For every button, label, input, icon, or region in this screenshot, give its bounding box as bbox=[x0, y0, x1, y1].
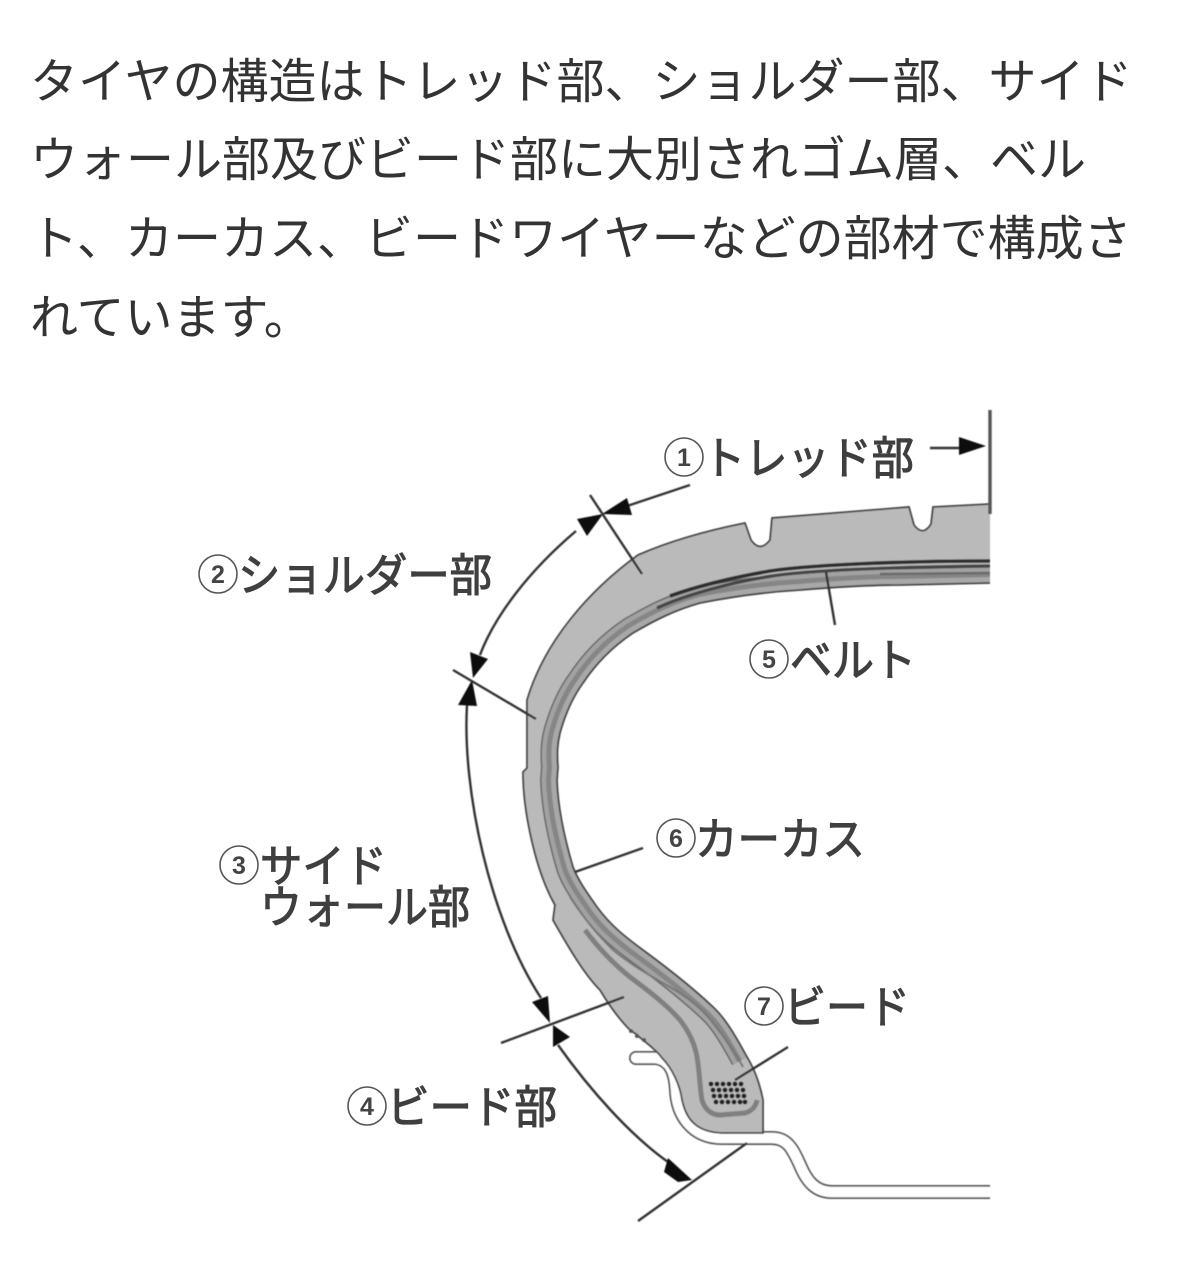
carcass layers bbox=[557, 560, 992, 1115]
label: tread: 1 bbox=[677, 444, 691, 472]
belt bbox=[657, 561, 990, 608]
label: belt: 5 bbox=[762, 646, 776, 674]
wheel rim bbox=[636, 1058, 1000, 1192]
text block: tire structure introduction bbox=[30, 56, 1133, 345]
label: shoulder: 2 bbox=[211, 561, 225, 589]
tread width marker bbox=[930, 410, 990, 514]
dimension arcs and arrows bbox=[458, 485, 692, 1182]
tire outline bbox=[523, 504, 990, 1133]
tire body bbox=[523, 504, 990, 1133]
section boundary ticks bbox=[453, 495, 747, 1221]
label: sidewall bbox=[220, 841, 470, 933]
text block: tire structure introduction: タイヤの構造はトレッド部、ショルダー部、サイド bbox=[30, 56, 1133, 109]
leader lines bbox=[575, 572, 835, 1080]
label: bead section: 4 bbox=[360, 1093, 374, 1121]
label: carcass: 6 bbox=[669, 825, 683, 853]
label: sidewall: 3 bbox=[232, 852, 246, 880]
text block: tire structure introduction: ウォール部及びビード部に大別されゴム層、ベル bbox=[30, 134, 1086, 187]
label: tread: トレッド部 bbox=[703, 433, 914, 484]
label: sidewall: ウォール部 bbox=[260, 882, 470, 933]
label: bead section: ビード部 bbox=[387, 1082, 557, 1133]
bead sidewall serrations bbox=[629, 1029, 646, 1042]
label: bead: ビード bbox=[784, 982, 910, 1033]
label: carcass: カーカス bbox=[695, 814, 865, 865]
text block: tire structure introduction: れています。 bbox=[30, 292, 312, 345]
label: bead: 7 bbox=[757, 993, 771, 1021]
text block: tire structure introduction: ト、カーカス、ビードワイヤーなどの部材で構成さ bbox=[30, 213, 1132, 266]
diagram: tire cross section bbox=[198, 409, 992, 1222]
bead wire bbox=[709, 1082, 747, 1104]
label: belt: ベルト bbox=[790, 635, 916, 686]
label: shoulder: ショルダー部 bbox=[238, 550, 492, 601]
label: sidewall: サイド bbox=[260, 841, 387, 892]
